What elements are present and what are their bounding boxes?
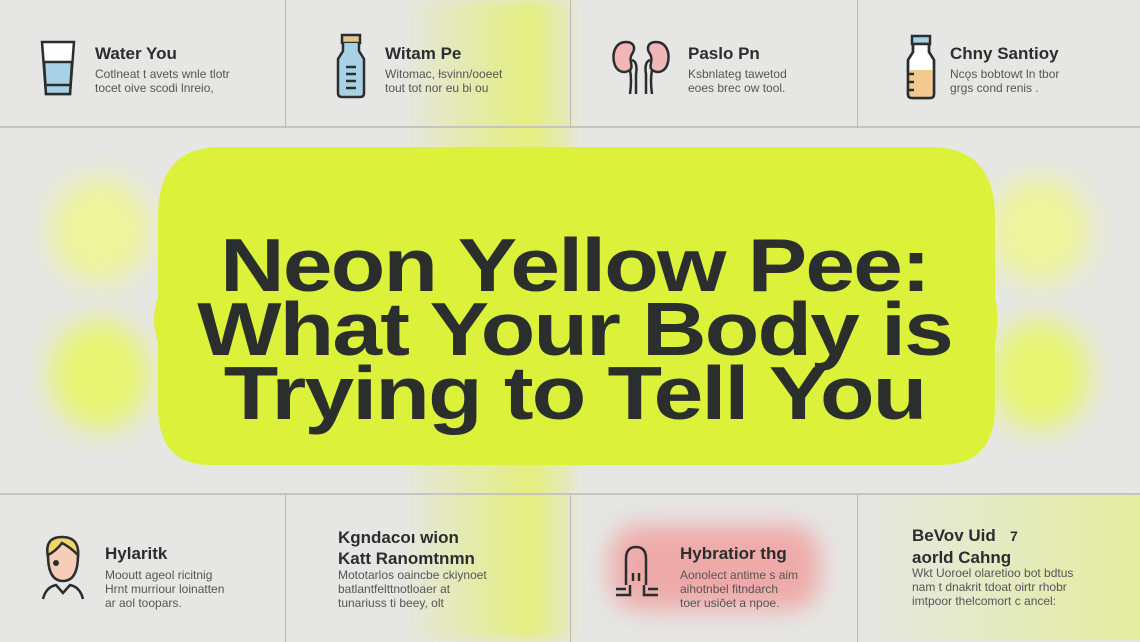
card: bevov: nam t dnakrit tdoat oirtr rhobr	[912, 580, 1067, 594]
icon: kidneys	[612, 40, 670, 94]
title pill	[154, 147, 998, 465]
card: bevov: BeVov Uid 7	[912, 526, 1018, 545]
title text: What Your Body is	[197, 287, 952, 371]
icon: bottle	[336, 34, 366, 98]
card: hybratior: Aonolect antime s aim	[680, 568, 798, 582]
card: water	[40, 40, 230, 96]
icon: bottle amber	[906, 34, 936, 100]
icon: glass	[40, 40, 76, 96]
card: face: Hrnt murriour loinatten	[105, 582, 224, 596]
card: face: ar aol toopars.	[105, 596, 182, 610]
card: chny	[906, 34, 1060, 100]
title text: Trying to Tell You	[224, 351, 925, 435]
card: face	[42, 536, 224, 610]
card: bevov: aorld Cahng	[912, 548, 1011, 567]
card: chny: Ncǫs bobtowt ln tbor	[950, 67, 1059, 81]
card: vitamin: Witomac, ƚsvinn/ooeet	[385, 67, 502, 81]
card: water: tocet oive scodi lnreio,	[95, 81, 214, 95]
card: bevov	[912, 526, 1073, 608]
card: chny: Chny Santioy	[950, 44, 1059, 63]
card: hybratior	[597, 512, 833, 623]
card: kgndacoi: Mototarlos oaincbe ckiynoet	[338, 568, 487, 582]
card: kgndacoi	[338, 528, 487, 610]
card: kgndacoi: tunariuss ti beey, olt	[338, 596, 444, 610]
card: kidneys	[612, 40, 787, 95]
card: kgndacoi: batlantfelttnotloaer at	[338, 582, 450, 596]
icon: nose	[616, 546, 658, 596]
bottom row of cards	[0, 493, 1140, 640]
card: face: Mooutt ageol ricitnig	[105, 568, 212, 582]
card: vitamin	[336, 34, 502, 98]
card: hybratior: Hybratior thg	[680, 544, 787, 563]
title text: Neon Yellow Pee:	[220, 223, 929, 307]
card: vitamin: tout tot nor eu bi ou	[385, 81, 488, 95]
card: kgndacoi: Katt Ranomtnmn	[338, 549, 475, 568]
card: bevov: imtpoor thelcomort c ancel:	[912, 594, 1056, 608]
card: hybratior: toer usiŏet a npoe.	[680, 596, 779, 610]
card: face: Hylaritk	[105, 544, 167, 563]
card: kidneys: Paslo Pn	[688, 44, 760, 63]
card: water: Cotlneat t avets wnle tlotr	[95, 67, 230, 81]
highlight glow	[610, 525, 820, 610]
top row of cards	[0, 0, 1140, 128]
title text	[197, 223, 952, 435]
card: kidneys: Ksbnlateg tawetod	[688, 67, 787, 81]
card: bevov: Wkt Uoroel olaretioo bot bdtus	[912, 566, 1073, 580]
card: hybratior: aihotnbel fitndarch	[680, 582, 778, 596]
card: vitamin: Witam Pe	[385, 44, 461, 63]
card: kgndacoi: Kgndacoı wion	[338, 528, 459, 547]
card: water: Water You	[95, 44, 177, 63]
icon: face	[42, 536, 84, 600]
card: kidneys: eoes brec ow tool.	[688, 81, 785, 95]
card: chny: grgs cond renis .	[950, 81, 1039, 95]
